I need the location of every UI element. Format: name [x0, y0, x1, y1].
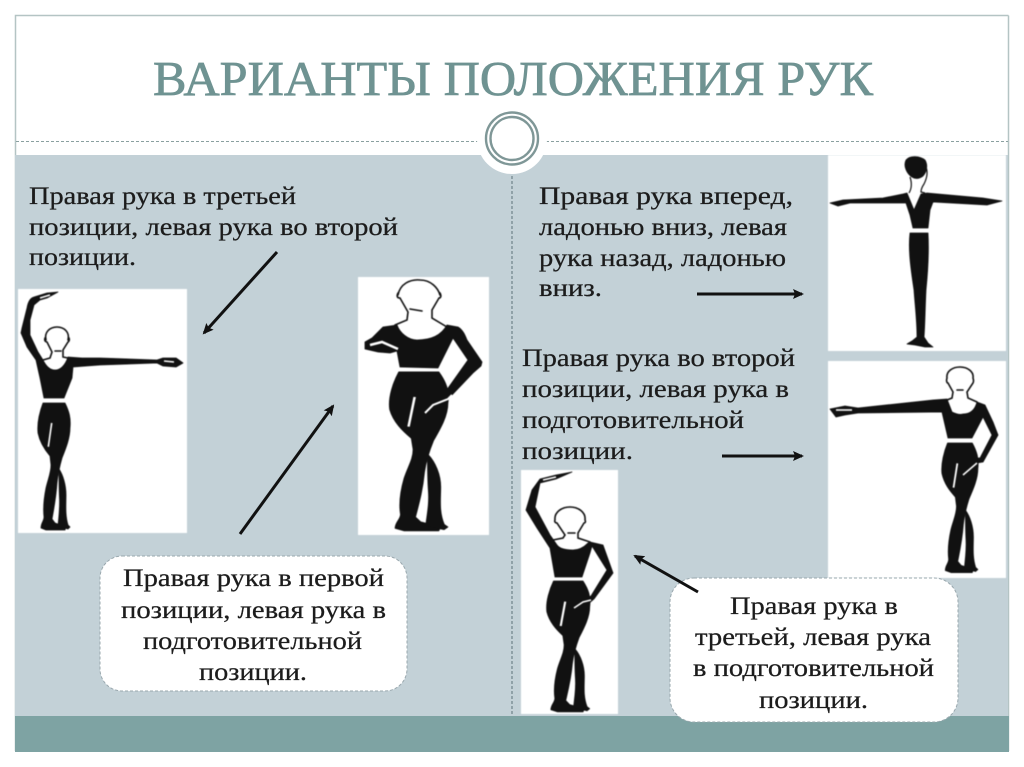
callout: third position: Правая рука в [730, 593, 898, 620]
text block: third and second position: позиции. [29, 244, 136, 271]
text block: second position and preparatory [522, 345, 795, 465]
text block: second position and preparatory: подготовительной [522, 407, 744, 434]
callout: first position [100, 556, 407, 691]
panel: blue-grey content background [15, 155, 1008, 717]
figure: right arm first position, left arm preparatory [358, 277, 489, 535]
callout: first position: позиции. [199, 659, 307, 686]
arrow: to figure four [722, 454, 802, 458]
callout: third position [670, 578, 958, 722]
callout: third position: позиции. [759, 687, 868, 714]
callout: third position: третьей, левая рука [695, 624, 931, 651]
text block: third and second position: Правая рука в третьей [29, 183, 296, 210]
figure: back view, arms extended [828, 155, 1006, 351]
title: ВАРИАНТЫ ПОЛОЖЕНИЯ РУК [153, 51, 873, 106]
text block: forward and back: вниз. [539, 275, 602, 302]
callout: first position: позиции, левая рука в [121, 597, 386, 624]
arrow: to figure two [240, 406, 333, 534]
text block: forward and back: рука назад, ладонью [539, 245, 786, 272]
figure: right arm third, left arm preparatory [521, 470, 618, 714]
callout: third position: в подготовительной [693, 655, 934, 682]
arrow: to figure three [697, 292, 802, 296]
arrow: to figure five [635, 556, 698, 592]
text block: forward and back [539, 183, 793, 302]
text block: third and second position: позиции, левая рука во второй [29, 214, 398, 241]
text block: second position and preparatory: позиции. [522, 438, 633, 465]
arrow: to figure one [204, 252, 277, 333]
text block: third and second position [29, 183, 398, 271]
callout: first position: Правая рука в первой [123, 565, 384, 592]
footer band [15, 716, 1009, 752]
text block: forward and back: ладонью вниз, левая [539, 214, 788, 241]
figure: right arm third position, left arm second position [18, 289, 187, 533]
callout: first position: подготовительной [143, 628, 362, 655]
text block: second position and preparatory: Правая рука во второй [522, 345, 795, 372]
icon: double ring medallion [477, 104, 547, 174]
text block: forward and back: Правая рука вперед, [539, 183, 793, 210]
figure: right arm second, left arm preparatory [828, 361, 1006, 578]
text block: second position and preparatory: позиции, левая рука в [522, 376, 789, 403]
